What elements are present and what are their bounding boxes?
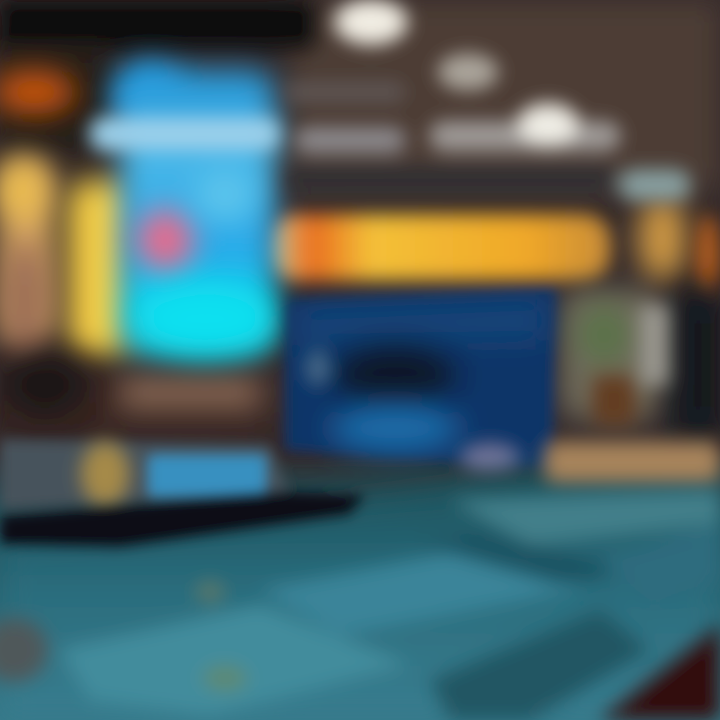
phone screen [114, 63, 275, 356]
orange light [0, 70, 76, 114]
background wall [0, 0, 720, 460]
keyboard rows [0, 490, 720, 720]
yellow window lights left [0, 160, 270, 433]
plant and right side [560, 290, 720, 440]
warm light band [270, 194, 720, 295]
desk surface [0, 442, 720, 720]
dark red corner [600, 625, 720, 720]
ceiling lamp [335, 0, 407, 44]
tablet [0, 440, 365, 548]
blurred headline [90, 54, 690, 200]
laptop screen [285, 288, 556, 472]
